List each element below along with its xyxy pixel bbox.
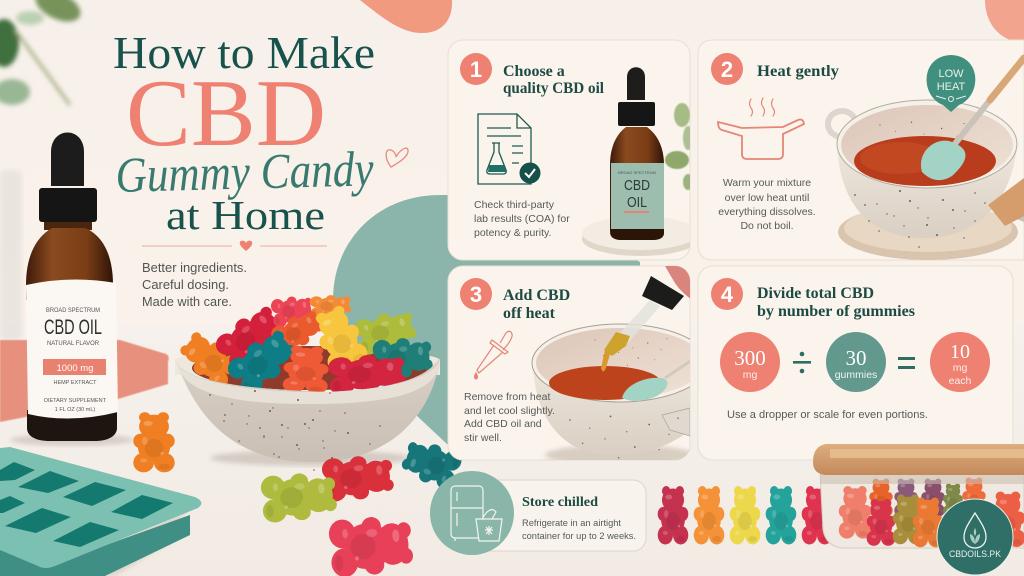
text: step 1 bbox=[474, 199, 570, 239]
number badge 2 bbox=[711, 53, 743, 85]
formula: 300 mg bbox=[720, 332, 780, 392]
text: step 1: lab results (COA) for bbox=[474, 213, 570, 225]
pot: heating bbox=[828, 58, 1024, 248]
bottle: large CBD oil bbox=[10, 132, 134, 446]
label: bottle bbox=[26, 279, 118, 419]
formula: 30 gummies: 30 bbox=[846, 346, 866, 370]
label: bottle: DIETARY SUPPLEMENT bbox=[44, 398, 107, 404]
heading: step 2: Heat gently bbox=[757, 63, 839, 80]
text: step 2: over low heat until bbox=[725, 192, 809, 204]
icon: fridge and container bbox=[430, 471, 514, 555]
title: How to Make bbox=[113, 27, 375, 78]
blob: coral top bbox=[360, 0, 452, 33]
tagline: Made with care. bbox=[142, 294, 232, 309]
formula: 10 mg each: each bbox=[949, 375, 972, 387]
heading: step 4: by number of gummies bbox=[757, 303, 915, 320]
storage panel bbox=[470, 480, 646, 551]
number badge 1: 1 bbox=[470, 57, 482, 82]
formula: 10 mg each bbox=[930, 332, 990, 392]
text: step 3 bbox=[464, 391, 555, 444]
badge: low heat: HEAT bbox=[937, 81, 966, 93]
bottle: step 1: OIL bbox=[627, 194, 647, 211]
panel: step 3 bbox=[448, 266, 708, 465]
blob: coral top right bbox=[985, 0, 1024, 42]
divider with heart bbox=[142, 241, 327, 251]
storage container bbox=[813, 444, 1024, 548]
bottle: step 1 bbox=[610, 67, 664, 240]
logo badge: CBDOILS.PK bbox=[949, 549, 1001, 559]
number badge 1 bbox=[460, 53, 492, 85]
leaves: card 1 bbox=[665, 103, 693, 190]
glass jar: blurred background bbox=[0, 170, 22, 340]
formula: 300 mg: 300 bbox=[734, 346, 766, 370]
text: step 4 note: Use a dropper or scale for even portions. bbox=[727, 409, 928, 421]
heading: step 4: Divide total CBD bbox=[757, 285, 874, 302]
heading: step 4 bbox=[757, 285, 915, 320]
number badge 3: 3 bbox=[470, 282, 482, 307]
text: step 3: and let cool slightly. bbox=[464, 405, 555, 417]
towel bbox=[0, 340, 169, 422]
label: bottle: 1 FL OZ (30 mL) bbox=[55, 407, 95, 413]
text: step 1: Check third-party bbox=[474, 199, 555, 211]
text: step 1: potency & purity. bbox=[474, 227, 551, 239]
heading: step 1: Choose a bbox=[503, 63, 565, 80]
number badge 3 bbox=[460, 278, 492, 310]
number badge 4: 4 bbox=[721, 282, 734, 307]
label: bottle: CBD OIL bbox=[44, 316, 102, 339]
blob: teal bbox=[333, 195, 640, 445]
tagline: Better ingredients. bbox=[142, 260, 247, 275]
label: bottle: HEMP EXTRACT bbox=[54, 380, 97, 386]
text: step 2: Warm your mixture bbox=[723, 177, 811, 189]
tagline: Careful dosing. bbox=[142, 277, 229, 292]
trivet bbox=[838, 212, 1018, 260]
heading: step 3: Add CBD bbox=[503, 287, 570, 304]
equals sign bbox=[898, 357, 915, 369]
bowl of gummies bbox=[175, 293, 440, 471]
badge: low heat: LOW bbox=[938, 68, 964, 80]
formula: 10 mg each: 10 bbox=[950, 341, 970, 363]
gummy: orange upright bbox=[133, 412, 175, 472]
pot: adding CBD bbox=[532, 266, 690, 460]
hand bbox=[665, 266, 690, 298]
title: Gummy Candy bbox=[115, 140, 375, 203]
number badge 4 bbox=[711, 278, 743, 310]
heading: step 1 bbox=[503, 63, 605, 97]
panel: step 2 bbox=[698, 40, 1024, 260]
tagline bbox=[142, 260, 247, 309]
label: bottle: NATURAL FLAVOR bbox=[47, 340, 99, 347]
text: step 2 bbox=[718, 177, 816, 232]
text: step 3: Add CBD oil and bbox=[464, 418, 542, 430]
panel: step 4 bbox=[698, 266, 1013, 460]
gummy: olive bbox=[260, 470, 338, 523]
gummy row bbox=[658, 486, 832, 544]
logo badge bbox=[937, 499, 1013, 575]
text: step 2: everything dissolves. bbox=[718, 206, 816, 218]
text: step 2: Do not boil. bbox=[740, 220, 794, 232]
icon: pot with steam bbox=[718, 98, 804, 159]
leaves: blurred plant top left bbox=[0, 0, 85, 105]
title: at Home bbox=[166, 192, 325, 238]
text: storage: Refrigerate in an airtight bbox=[522, 518, 621, 529]
heading: step 3 bbox=[503, 287, 570, 322]
gummy: pink bbox=[328, 514, 414, 576]
dropper bbox=[601, 276, 684, 372]
label: bottle: BROAD SPECTRUM bbox=[46, 307, 100, 314]
silicone tray bbox=[0, 447, 201, 576]
heading: store chilled: Store chilled bbox=[522, 494, 599, 509]
heading: step 1: quality CBD oil bbox=[503, 80, 605, 97]
number badge 2: 2 bbox=[721, 57, 733, 82]
formula: 30 gummies bbox=[826, 332, 886, 392]
divide sign bbox=[793, 352, 811, 373]
plate bbox=[582, 218, 690, 256]
formula: 300 mg: mg bbox=[743, 369, 757, 381]
icon: heart outline bbox=[386, 148, 408, 167]
icon: dropper bbox=[474, 331, 512, 379]
label: bottle: 1000 mg bbox=[57, 363, 93, 374]
text: step 3: Remove from heat bbox=[464, 391, 550, 403]
heading: step 3: off heat bbox=[503, 305, 556, 322]
gummy: red bbox=[321, 453, 395, 502]
badge: low heat bbox=[927, 55, 975, 112]
formula: 10 mg each: mg bbox=[953, 362, 967, 374]
gummy: teal bbox=[398, 436, 464, 492]
panel: step 1 bbox=[448, 40, 698, 260]
title bbox=[113, 27, 375, 238]
formula: 30 gummies: gummies bbox=[835, 369, 877, 381]
title: CBD bbox=[126, 60, 326, 166]
text: step 3: stir well. bbox=[464, 432, 502, 444]
text: storage bbox=[522, 518, 636, 542]
bottle: step 1: BROAD SPECTRUM bbox=[618, 170, 656, 175]
text: storage: container for up to 2 weeks. bbox=[522, 531, 636, 542]
icon: lab document bbox=[478, 114, 540, 184]
bottle: step 1: CBD bbox=[624, 177, 650, 194]
